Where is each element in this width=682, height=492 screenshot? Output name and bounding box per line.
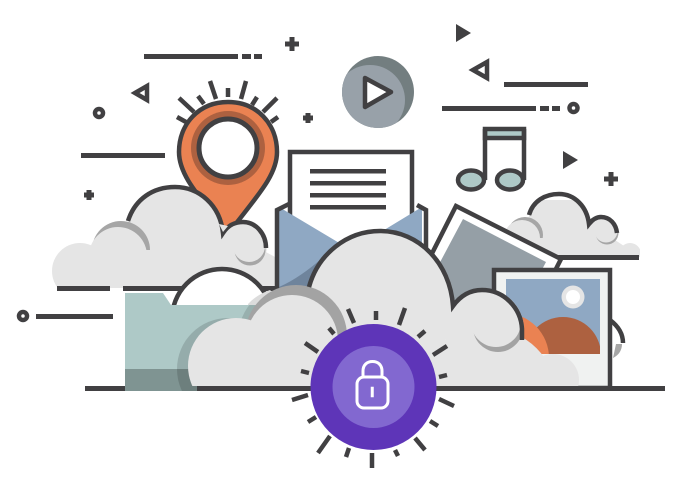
left cloud base line <box>57 286 277 291</box>
icon: play button <box>342 56 414 128</box>
letter text lines <box>310 169 386 210</box>
photo sun <box>562 286 584 308</box>
icon: plus top <box>285 37 299 51</box>
tilted back photo <box>415 206 561 340</box>
lock badge <box>292 308 454 468</box>
cloud crescent on folder <box>177 318 232 391</box>
left line <box>81 153 165 158</box>
right top line <box>504 82 588 87</box>
left small line with ring <box>19 312 113 320</box>
foreground cloud <box>177 228 579 391</box>
icon: outlined triangle right <box>473 62 487 78</box>
icon: outlined triangle left <box>135 86 147 100</box>
cloud arc behind front photo <box>610 320 623 358</box>
icon: solid triangle right <box>563 151 578 169</box>
icon: plus centre <box>303 113 313 123</box>
right background cloud <box>506 192 640 257</box>
white hill arc behind folder <box>172 269 272 369</box>
left background cloud <box>52 187 277 299</box>
icon: location pin <box>177 81 278 234</box>
back shoulder shading <box>242 305 256 320</box>
letter <box>290 152 412 250</box>
ground line <box>85 386 665 391</box>
right dashed line with ring <box>442 104 578 112</box>
icon: plus right <box>604 172 618 186</box>
photo image <box>506 279 600 354</box>
icon: plus left <box>84 190 94 200</box>
envelope body <box>279 207 422 295</box>
icon: padlock <box>357 362 388 408</box>
front photo <box>492 268 612 386</box>
envelope <box>277 152 426 300</box>
folder <box>125 293 300 391</box>
icon: small ring left <box>95 109 103 117</box>
icon: music notes <box>458 129 524 190</box>
icon: solid triangle top <box>456 24 471 42</box>
top left dashed line <box>144 54 262 59</box>
right cloud base line <box>556 255 639 260</box>
